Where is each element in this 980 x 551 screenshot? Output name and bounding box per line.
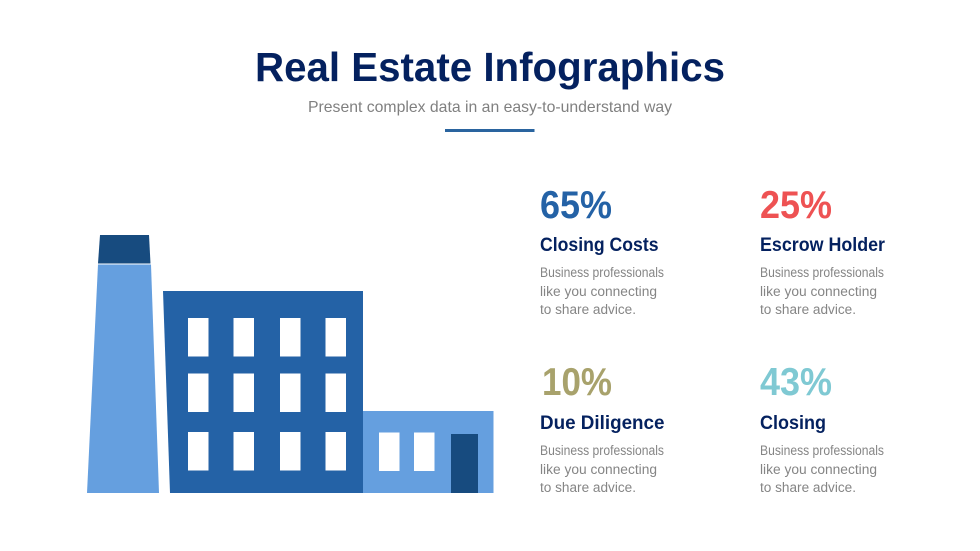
description	[540, 265, 664, 317]
main building with windows	[163, 291, 363, 493]
title underline	[445, 129, 534, 132]
annex building	[363, 411, 494, 493]
chimney cap	[98, 235, 150, 264]
stat block: closing	[760, 361, 884, 495]
annex door	[451, 434, 478, 493]
percentage 25%: 25%	[760, 184, 832, 227]
heading: Closing	[760, 413, 826, 434]
title: Real Estate Infographics	[255, 44, 725, 90]
description: like you connecting	[760, 284, 877, 299]
description: Business professionals	[540, 443, 664, 458]
description: to share advice.	[540, 302, 636, 317]
description: like you connecting	[540, 462, 657, 477]
heading: Due Diligence	[540, 413, 664, 434]
description: like you connecting	[540, 284, 657, 299]
stat block: closing costs	[540, 184, 664, 317]
illustration: factory building	[87, 235, 494, 493]
description: Business professionals	[760, 443, 884, 458]
stat block: escrow holder	[760, 184, 886, 317]
chimney body	[87, 264, 159, 493]
heading: Closing Costs	[540, 235, 658, 256]
description	[760, 265, 884, 317]
description: to share advice.	[760, 480, 856, 495]
description: Business professionals	[760, 265, 884, 280]
percentage 43%: 43%	[760, 361, 832, 404]
stat block: due diligence	[540, 361, 664, 495]
description: to share advice.	[760, 302, 856, 317]
description	[540, 443, 664, 495]
description: like you connecting	[760, 462, 877, 477]
description	[760, 443, 884, 495]
subtitle: Present complex data in an easy-to-understand way	[308, 99, 672, 116]
description: to share advice.	[540, 480, 636, 495]
description: Business professionals	[540, 265, 664, 280]
percentage 65%: 65%	[540, 184, 612, 227]
heading: Escrow Holder	[760, 235, 886, 256]
percentage 10%: 10%	[542, 361, 612, 404]
